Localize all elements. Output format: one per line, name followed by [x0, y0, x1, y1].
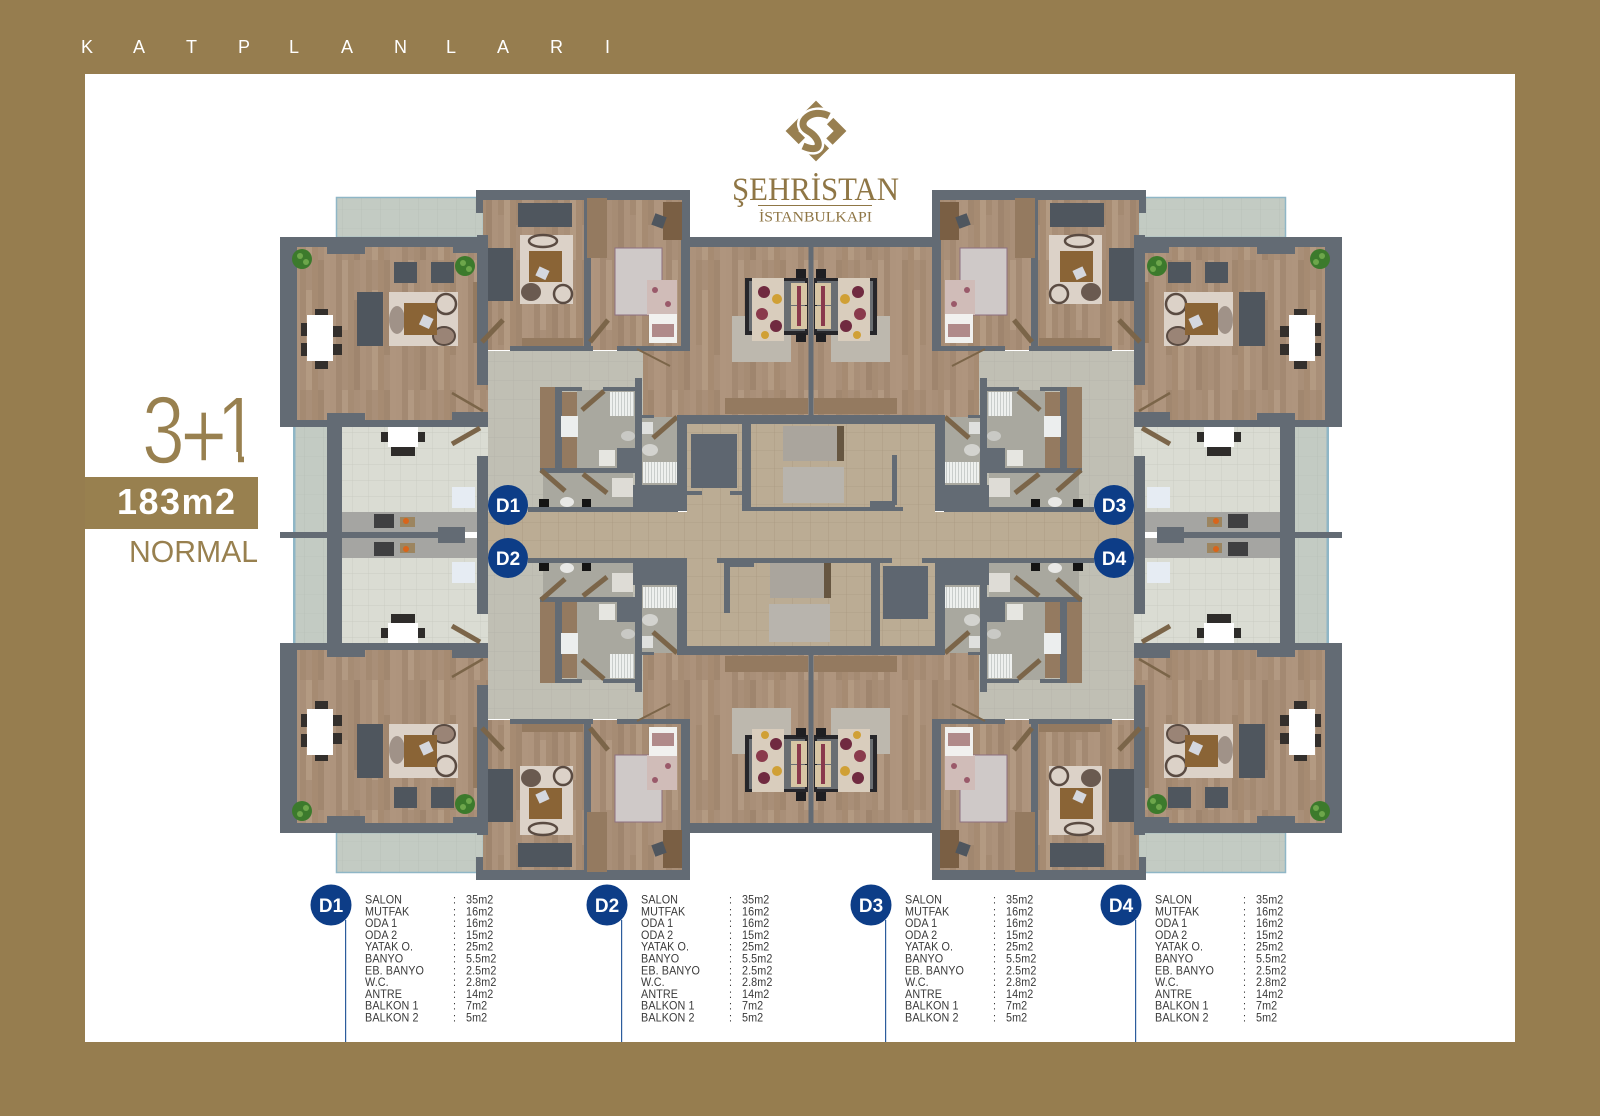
- lower core walls: [677, 558, 945, 655]
- pillows: [791, 283, 807, 329]
- room rows: YATAK O.: [641, 941, 689, 954]
- room rows: 5m2: [742, 1012, 763, 1025]
- room rows: ODA 1: [1155, 918, 1187, 930]
- elevator: [691, 434, 737, 488]
- area bar: [85, 477, 258, 529]
- room rows: :: [453, 988, 456, 1001]
- room rows: ODA 2: [905, 929, 937, 942]
- room rows: 7m2: [1256, 1000, 1277, 1013]
- room rows: 25m2: [1006, 941, 1033, 954]
- room rows: :: [993, 941, 996, 954]
- list badge: [586, 884, 628, 926]
- room rows: 7m2: [742, 1000, 763, 1013]
- logo subtitle: İSTANBULKAPI: [759, 210, 872, 226]
- room rows: :: [1243, 894, 1246, 907]
- room rows: SALON: [641, 894, 678, 907]
- room rows: 16m2: [742, 906, 769, 918]
- room rows: 15m2: [742, 929, 769, 942]
- room rows: 2.5m2: [742, 965, 772, 977]
- badge D2: [488, 538, 528, 578]
- en-suite shower: [599, 450, 615, 466]
- badge D3: D3: [1102, 496, 1126, 517]
- room rows: :: [993, 894, 996, 907]
- list badge: D2: [595, 896, 619, 917]
- list badge: [1100, 884, 1142, 926]
- room rows: 16m2: [466, 918, 493, 930]
- room rows: MUTFAK: [905, 906, 950, 918]
- room rows: [1155, 894, 1286, 1025]
- heading: room type: 1: [216, 377, 259, 484]
- room rows: MUTFAK: [1155, 906, 1200, 918]
- rug: [520, 235, 573, 304]
- room rows: :: [729, 929, 732, 942]
- lower core floor: [687, 558, 935, 646]
- room rows: ODA 2: [365, 929, 397, 942]
- room rows: [365, 894, 496, 1025]
- area list D3: [850, 884, 1036, 1042]
- room rows: :: [729, 941, 732, 954]
- connector line: [345, 920, 346, 1042]
- master bedroom floor: [643, 247, 811, 417]
- room rows: :: [1243, 977, 1246, 989]
- room 2 floor: [587, 200, 683, 350]
- room rows: YATAK O.: [365, 941, 413, 954]
- room rows: :: [729, 953, 732, 966]
- en-suite toilet: [621, 431, 635, 441]
- room rows: 14m2: [1006, 988, 1033, 1001]
- room rows: :: [1243, 906, 1246, 918]
- bed frame: [745, 278, 808, 335]
- room rows: 5.5m2: [742, 953, 772, 966]
- room rows: [905, 894, 1036, 1025]
- room rows: :: [453, 918, 456, 930]
- table: [529, 251, 562, 282]
- room rows: 5.5m2: [1006, 953, 1036, 966]
- stove: [374, 514, 394, 528]
- room rows: 15m2: [1006, 929, 1033, 942]
- title: KATPLANLARI: [81, 37, 610, 57]
- room rows: W.C.: [905, 977, 929, 989]
- desk: [663, 202, 682, 240]
- badge D4: [1094, 538, 1134, 578]
- room rows: 2.8m2: [1256, 977, 1286, 989]
- bedspread: [752, 278, 784, 341]
- room rows: ANTRE: [641, 988, 678, 1001]
- en-suite sink: [561, 416, 578, 437]
- room rows: 16m2: [466, 906, 493, 918]
- rug: [389, 292, 458, 346]
- sofa: [357, 292, 383, 346]
- dining set: [301, 309, 342, 369]
- logo wordmark: ŞEHRİSTAN: [732, 172, 899, 208]
- living room furniture: [301, 262, 458, 369]
- bathroom floor: [543, 473, 633, 508]
- kitchen furniture: [374, 427, 475, 528]
- area value: 183m2: [117, 481, 235, 522]
- wc toilet: [642, 444, 658, 456]
- room rows: 2.8m2: [742, 977, 772, 989]
- rug: [732, 316, 791, 362]
- room rows: 5m2: [1006, 1012, 1027, 1025]
- room rows: W.C.: [1155, 977, 1179, 989]
- room rows: :: [1243, 1000, 1246, 1013]
- room 2 furniture: [615, 202, 682, 343]
- room rows: BALKON 2: [641, 1012, 695, 1025]
- room rows: :: [1243, 965, 1246, 977]
- area list D2: [586, 884, 772, 1042]
- nightstands: [796, 269, 806, 342]
- wc radiator: [643, 462, 677, 483]
- room rows: :: [453, 941, 456, 954]
- room rows: 5m2: [1256, 1012, 1277, 1025]
- wc floor: [642, 417, 678, 485]
- room rows: :: [993, 906, 996, 918]
- room rows: 15m2: [1256, 929, 1283, 942]
- kitchen counter: [338, 512, 478, 532]
- elevator: [883, 566, 928, 619]
- heading: room type: [142, 377, 260, 492]
- room rows: 16m2: [1006, 906, 1033, 918]
- room rows: :: [993, 988, 996, 1001]
- logo rule: [758, 205, 872, 206]
- room rows: SALON: [905, 894, 942, 907]
- white panel: [85, 74, 1515, 1042]
- kitchen balcony: [293, 427, 328, 535]
- room rows: BALKON 1: [905, 1000, 959, 1013]
- room rows: :: [993, 977, 996, 989]
- room rows: :: [729, 1012, 732, 1025]
- room rows: 16m2: [1006, 918, 1033, 930]
- room rows: MUTFAK: [365, 906, 410, 918]
- room rows: EB. BANYO: [905, 965, 964, 977]
- entrance hall floor: [488, 351, 643, 512]
- kitchen table: [381, 427, 425, 456]
- bed: [647, 280, 677, 343]
- room rows: :: [993, 953, 996, 966]
- room rows: :: [453, 953, 456, 966]
- bathroom fixtures: [539, 392, 677, 507]
- list badge: [310, 884, 352, 926]
- upper core walls: [677, 415, 945, 511]
- room rows: 35m2: [466, 894, 493, 907]
- room rows: 35m2: [1006, 894, 1033, 907]
- room rows: 14m2: [1256, 988, 1283, 1001]
- room rows: 25m2: [1256, 941, 1283, 954]
- laptop: [419, 314, 434, 329]
- room rows: :: [1243, 918, 1246, 930]
- corridor: [488, 512, 1134, 558]
- room rows: W.C.: [641, 977, 665, 989]
- room rows: 16m2: [1256, 906, 1283, 918]
- heading: room type: +: [180, 381, 227, 492]
- list badge: D3: [859, 896, 883, 917]
- room rows: :: [453, 929, 456, 942]
- plants: [292, 249, 475, 276]
- badge D2: D2: [496, 549, 520, 570]
- connector line: [1135, 920, 1136, 1042]
- bathroom bins: [539, 499, 591, 507]
- room rows: YATAK O.: [905, 941, 953, 954]
- chair: [651, 213, 667, 229]
- en-suite bath floor: [577, 390, 635, 470]
- room rows: 2.5m2: [466, 965, 496, 977]
- room rows: 35m2: [1256, 894, 1283, 907]
- room rows: :: [729, 906, 732, 918]
- room rows: BANYO: [365, 953, 403, 966]
- room rows: :: [993, 1000, 996, 1013]
- room rows: :: [453, 965, 456, 977]
- badge D4: D4: [1102, 549, 1127, 570]
- room rows: 2.8m2: [466, 977, 496, 989]
- room rows: :: [993, 965, 996, 977]
- unit D3: [810, 190, 1342, 545]
- badge D3: [1094, 485, 1134, 525]
- room rows: :: [1243, 953, 1246, 966]
- connector line: [885, 920, 886, 1042]
- room rows: 25m2: [466, 941, 493, 954]
- room rows: ODA 1: [641, 918, 673, 930]
- area list D1: [310, 884, 496, 1042]
- list badge: D4: [1109, 896, 1134, 917]
- room rows: EB. BANYO: [641, 965, 700, 977]
- bathroom sink: [560, 497, 574, 507]
- room rows: 16m2: [742, 918, 769, 930]
- foot cover: [216, 452, 238, 467]
- room rows: 14m2: [466, 988, 493, 1001]
- room rows: EB. BANYO: [1155, 965, 1214, 977]
- room rows: :: [453, 977, 456, 989]
- room rows: :: [993, 929, 996, 942]
- room rows: 2.5m2: [1256, 965, 1286, 977]
- wardrobes: [473, 198, 808, 468]
- master bedroom furniture: [732, 269, 808, 362]
- room rows: :: [729, 1000, 732, 1013]
- room 1 furniture: [488, 203, 573, 304]
- room rows: BALKON 1: [365, 1000, 419, 1013]
- walls: [280, 190, 812, 545]
- room 1 floor: [483, 200, 587, 350]
- room rows: ODA 1: [365, 918, 397, 930]
- room rows: 5.5m2: [1256, 953, 1286, 966]
- room rows: 35m2: [742, 894, 769, 907]
- wc sink: [642, 422, 653, 434]
- room rows: ANTRE: [365, 988, 402, 1001]
- room rows: 5.5m2: [466, 953, 496, 966]
- upper core: [677, 415, 945, 512]
- room rows: :: [729, 988, 732, 1001]
- room rows: :: [993, 918, 996, 930]
- room rows: SALON: [365, 894, 402, 907]
- logo mark: [792, 107, 840, 155]
- room rows: BANYO: [905, 953, 943, 966]
- room rows: MUTFAK: [641, 906, 686, 918]
- room rows: ODA 1: [905, 918, 937, 930]
- heading: room type: 3: [142, 377, 185, 484]
- doors: [452, 320, 677, 493]
- room rows: :: [729, 918, 732, 930]
- room rows: :: [453, 1000, 456, 1013]
- room rows: 15m2: [466, 929, 493, 942]
- food tray: [400, 517, 415, 527]
- room rows: :: [453, 1012, 456, 1025]
- room rows: BALKON 2: [905, 1012, 959, 1025]
- unit D1: [280, 190, 812, 545]
- room rows: BALKON 2: [1155, 1012, 1209, 1025]
- room rows: :: [1243, 941, 1246, 954]
- room rows: ANTRE: [905, 988, 942, 1001]
- room rows: ANTRE: [1155, 988, 1192, 1001]
- living room floor: [297, 247, 488, 423]
- room rows: BALKON 1: [1155, 1000, 1209, 1013]
- room rows: :: [1243, 988, 1246, 1001]
- room rows: :: [729, 977, 732, 989]
- room rows: BANYO: [641, 953, 679, 966]
- fridge: [452, 487, 475, 508]
- floor plan: [280, 190, 1342, 880]
- floor type: NORMAL: [129, 534, 258, 569]
- list badge: [850, 884, 892, 926]
- list badge: D1: [319, 896, 344, 917]
- room rows: SALON: [1155, 894, 1192, 907]
- room rows: 7m2: [466, 1000, 487, 1013]
- badge D1: [488, 485, 528, 525]
- coffee table: [404, 303, 437, 335]
- area list D4: [1100, 884, 1286, 1042]
- unit D2: [280, 525, 812, 880]
- room rows: 25m2: [742, 941, 769, 954]
- sofas: [488, 203, 572, 301]
- room rows: :: [1243, 1012, 1246, 1025]
- room rows: 7m2: [1006, 1000, 1027, 1013]
- room rows: W.C.: [365, 977, 389, 989]
- room rows: BANYO: [1155, 953, 1193, 966]
- room rows: :: [729, 965, 732, 977]
- room rows: 14m2: [742, 988, 769, 1001]
- marble panels: [769, 563, 831, 642]
- room rows: 16m2: [1256, 918, 1283, 930]
- room rows: 2.8m2: [1006, 977, 1036, 989]
- room rows: BALKON 1: [641, 1000, 695, 1013]
- room rows: ODA 2: [1155, 929, 1187, 942]
- connector line: [621, 920, 622, 1042]
- kitchen floor: [342, 427, 488, 512]
- rug: [615, 248, 662, 315]
- room rows: [641, 894, 772, 1025]
- room rows: BALKON 2: [365, 1012, 419, 1025]
- en-suite radiator: [610, 392, 634, 416]
- room rows: :: [1243, 929, 1246, 942]
- room rows: :: [453, 894, 456, 907]
- badge D1: D1: [496, 496, 521, 517]
- room rows: ODA 2: [641, 929, 673, 942]
- room rows: EB. BANYO: [365, 965, 424, 977]
- top balcony: [336, 198, 484, 238]
- armchairs: [394, 262, 454, 283]
- room rows: 2.5m2: [1006, 965, 1036, 977]
- room rows: :: [993, 1012, 996, 1025]
- logo: [732, 107, 899, 226]
- room rows: :: [729, 894, 732, 907]
- laptop: [535, 266, 550, 280]
- upper core floor: [687, 424, 935, 512]
- bathroom shower: [612, 478, 633, 497]
- room rows: :: [453, 906, 456, 918]
- marble panels: [783, 426, 844, 503]
- lower core: [677, 558, 945, 655]
- room rows: 5m2: [466, 1012, 487, 1025]
- unit D4: [810, 525, 1342, 880]
- room rows: YATAK O.: [1155, 941, 1203, 954]
